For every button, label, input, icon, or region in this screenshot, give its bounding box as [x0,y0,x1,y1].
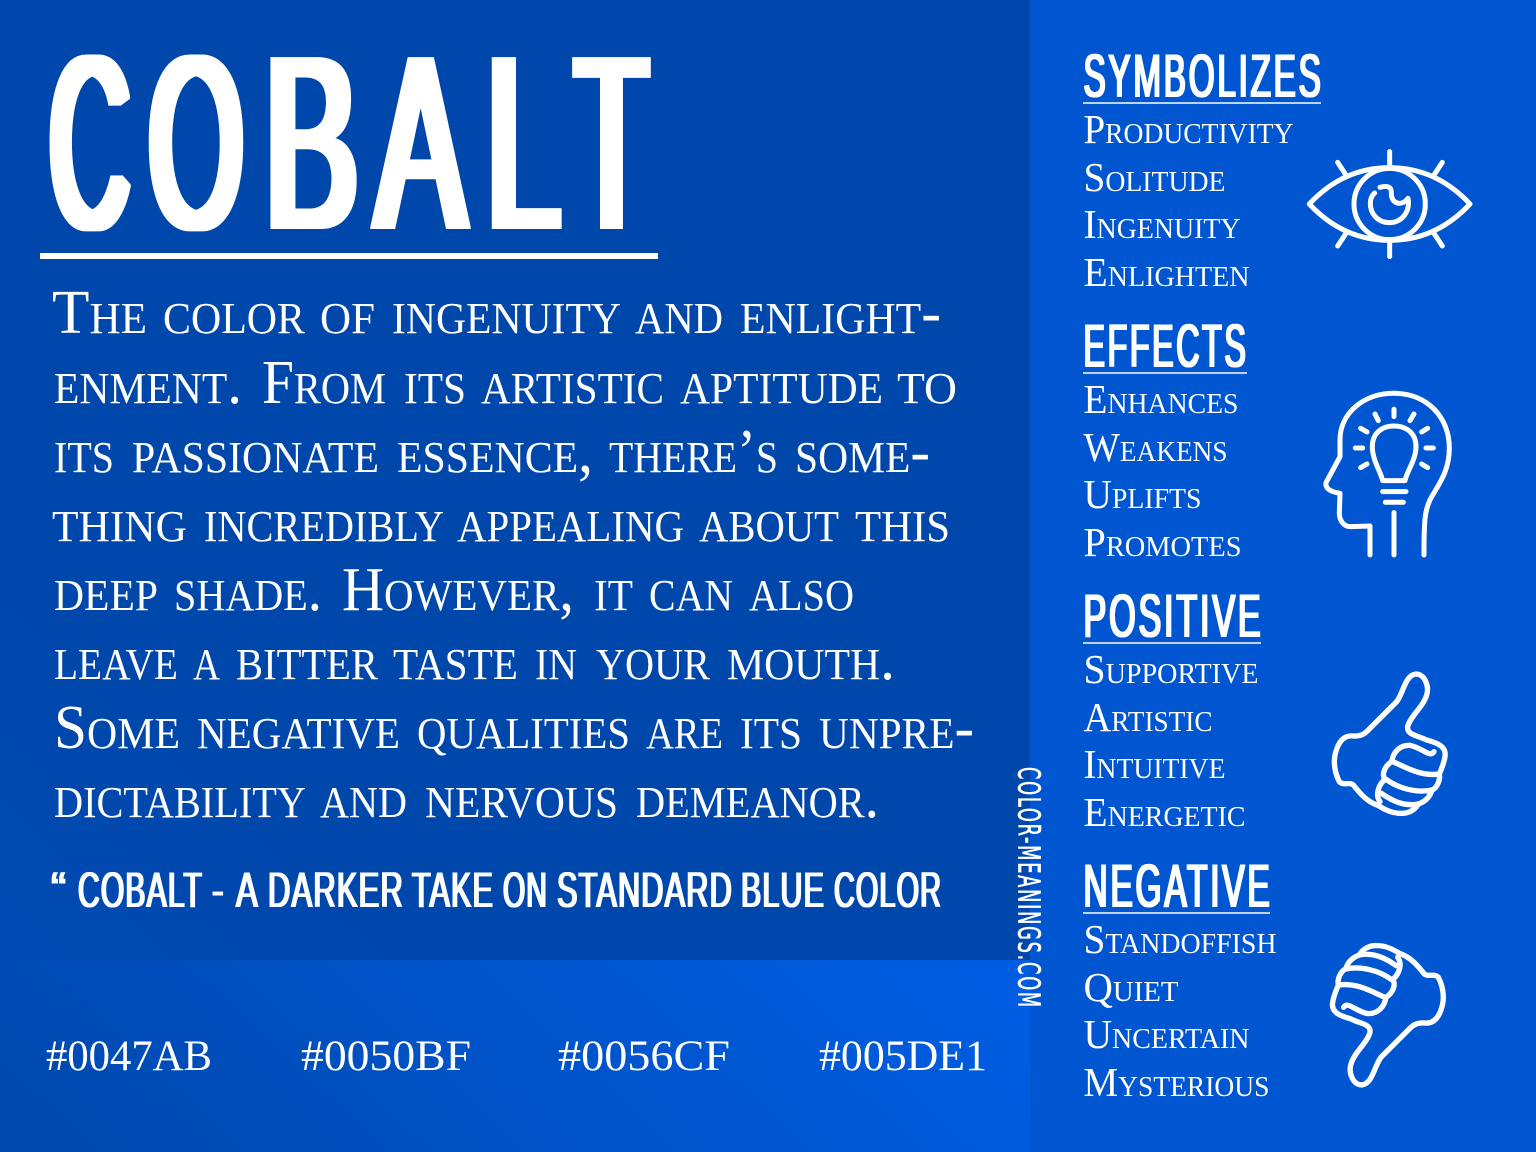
text block: description: aptitude [680,347,883,417]
heading: symbolizes: SYMBOLIZES [1084,42,1324,110]
text block: description: about [699,485,839,555]
title: O [149,5,243,281]
text block: description: thing [52,485,187,555]
infographic canvas: T [576,5,648,281]
text block: description: ingenuity [392,277,621,347]
text block: description: unpre- [819,692,974,762]
heading: positive: POSITIVE [1084,582,1264,650]
text block: description: essence, [397,416,593,486]
list: symbolizes: Ingenuity [1084,201,1241,247]
text block: description: The [52,277,147,347]
text block: description: enlight- [740,277,941,347]
text block: description: to [897,347,957,417]
text block: description: color [163,277,306,347]
text block: description: Some [54,692,180,762]
list: effects: Enhances [1084,376,1238,422]
quote: A [236,862,259,918]
quote: ON [503,862,548,918]
list: negative: Standoffish [1084,916,1277,962]
hex codes: #0056CF [558,1033,730,1080]
text block: description: artistic [481,347,664,417]
list: negative: Uncertain [1084,1011,1250,1057]
panel: hex colour band background [0,960,1030,1152]
title: A [376,5,465,281]
title: C [50,5,129,281]
list: symbolizes [1084,106,1294,295]
hex codes: #005DE1 [819,1033,987,1080]
icon: head with light bulb [1326,393,1449,555]
hex codes: #0050BF [301,1033,471,1080]
quote [51,862,942,918]
panel: positive [1083,582,1264,835]
list: positive: Intuitive [1084,741,1226,787]
title [50,5,648,281]
quote: - [212,862,225,918]
list: positive [1084,646,1258,835]
text block: description: However, [342,554,574,624]
text block: description: a [193,623,220,693]
text block: description: enment. [54,347,242,417]
text block: description: mouth. [727,623,895,693]
text block: description: nervous [425,761,618,831]
text block: description: its [740,692,802,762]
list: negative [1084,916,1277,1105]
list: effects: Promotes [1084,519,1242,565]
quote: TAKE [412,862,494,918]
quote: COBALT [78,862,203,918]
text block: description: your [596,623,711,693]
icon: thumbs up [1334,674,1445,813]
title: B [265,5,358,281]
text block: description: this [855,485,950,555]
text block: description: there’s [609,416,778,486]
text block: description: bitter [236,623,379,693]
text block: description: qualities [417,692,630,762]
icon: thumbs down [1332,946,1443,1085]
text block: description: also [749,554,854,624]
list: symbolizes: Solitude [1084,154,1226,200]
list: effects: Weakens [1084,424,1228,470]
heading: negative: NEGATIVE [1084,852,1272,920]
text block: description: its [404,347,466,417]
text block: description: deep [54,554,158,624]
hex codes [46,1033,987,1080]
list: positive: Artistic [1084,694,1212,740]
text block: description: in [535,623,577,693]
text block: description: dictability [54,761,306,831]
panel: symbolizes [1083,42,1324,295]
text block: description: From [262,347,386,417]
quote: “ [51,862,68,918]
text block: description: passionate [132,416,379,486]
title underline [40,253,658,259]
list: effects [1084,376,1242,565]
text block: description: and [635,277,723,347]
text block: description: it [594,554,633,624]
heading: effects: EFFECTS [1084,312,1248,380]
panel: main dark background [0,0,1030,960]
text block: description: can [649,554,733,624]
text block: description: and [320,761,407,831]
list: negative: Mysterious [1084,1059,1270,1105]
text block: description: incredibly [204,485,444,555]
list: symbolizes: Productivity [1084,106,1294,152]
text block: description: demeanor. [636,761,879,831]
list: symbolizes: Enlighten [1084,249,1250,295]
quote: STANDARD [557,862,733,918]
quote: BLUE [741,862,825,918]
text block: description [52,277,974,831]
quote: DARKER [268,862,404,918]
hex codes: #0047AB [46,1033,212,1080]
text block: description: appealing [457,485,684,555]
text block: description: are [646,692,723,762]
text block: description: leave [54,623,178,693]
panel: effects [1083,312,1248,565]
panel: negative [1083,852,1277,1105]
icon: eye [1309,152,1470,257]
text block: description: its [54,416,114,486]
list: negative: Quiet [1084,964,1179,1010]
list: positive: Supportive [1084,646,1258,692]
list: effects: Uplifts [1084,471,1202,517]
quote: COLOR [834,862,942,918]
text block: description: shade. [174,554,322,624]
text block: description: of [320,277,375,347]
list: positive: Energetic [1084,789,1246,835]
text block: description: negative [197,692,400,762]
title: L [487,5,560,281]
text block: description: taste [393,623,518,693]
text block: description: some- [795,416,930,486]
